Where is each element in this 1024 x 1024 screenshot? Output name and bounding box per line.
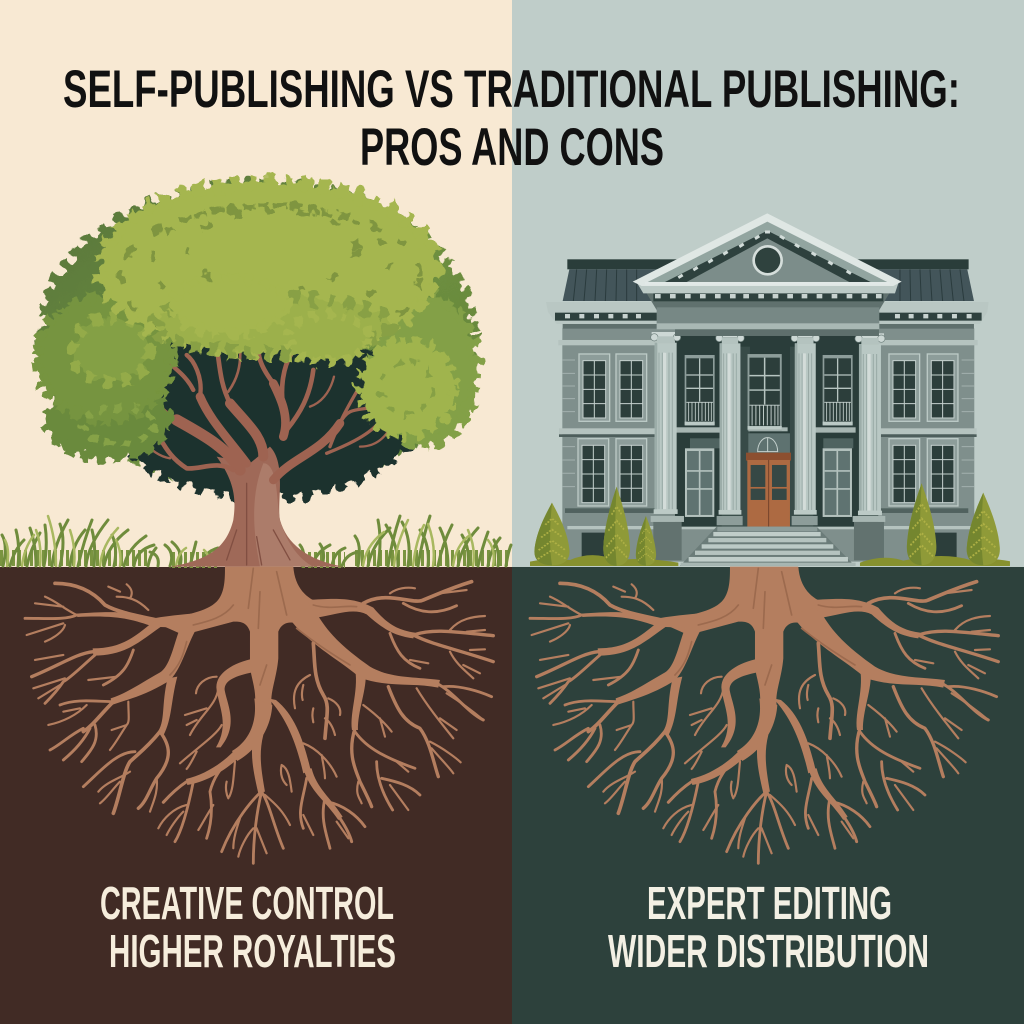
panel: self-publishing soil bbox=[0, 567, 512, 1024]
stairs bbox=[680, 527, 856, 566]
fanlight bbox=[758, 438, 778, 452]
walls bbox=[558, 328, 978, 562]
roof bbox=[563, 259, 974, 301]
columns bbox=[651, 332, 885, 560]
grass: left and right bbox=[0, 516, 511, 566]
canopy back foliage bbox=[44, 185, 472, 485]
title bbox=[63, 60, 960, 177]
canopy right front cluster bbox=[361, 342, 453, 434]
panel: self-publishing sky bbox=[0, 0, 512, 567]
tree trunk and branches bbox=[145, 345, 390, 567]
caption: self-publishing benefits: HIGHER ROYALTIES bbox=[109, 925, 396, 977]
canopy dark interior bbox=[113, 324, 417, 496]
illustration: tree bbox=[0, 182, 511, 567]
title: PROS AND CONS bbox=[360, 118, 664, 177]
caption: self-publishing benefits: CREATIVE CONTROL bbox=[100, 877, 394, 929]
canopy light top foliage bbox=[100, 182, 436, 362]
canopy right back cluster bbox=[373, 296, 477, 444]
roots: left tree bbox=[25, 567, 493, 863]
shrubs bbox=[530, 483, 1010, 566]
panel: traditional publishing sky bbox=[512, 0, 1024, 567]
caption: traditional publishing benefits bbox=[608, 877, 929, 977]
caption: traditional publishing benefits: EXPERT EDITING bbox=[647, 877, 892, 929]
portico recess bbox=[675, 335, 878, 527]
side cornices bbox=[546, 302, 989, 329]
roots: right building bbox=[530, 567, 998, 863]
illustration: classical publishing house bbox=[530, 213, 1010, 566]
canopy left cluster bbox=[37, 296, 173, 458]
panel: traditional publishing soil bbox=[512, 567, 1024, 1024]
pediment bbox=[633, 213, 902, 286]
door bbox=[746, 453, 791, 527]
central windows bbox=[685, 354, 853, 517]
entablature bbox=[637, 283, 898, 336]
recess lower wall bbox=[676, 347, 856, 527]
side windows bbox=[577, 353, 959, 507]
caption: self-publishing benefits bbox=[100, 877, 396, 977]
